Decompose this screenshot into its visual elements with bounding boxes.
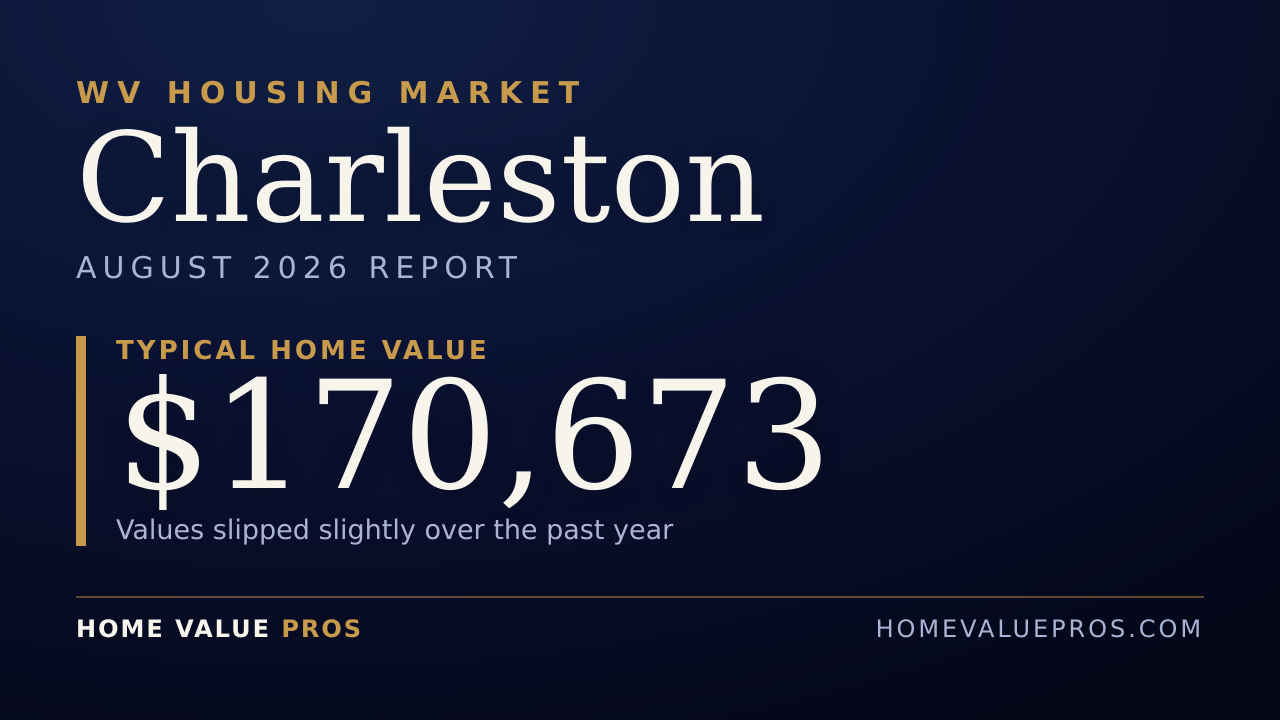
report date: AUGUST 2026 REPORT xyxy=(76,251,523,286)
website: HOMEVALUEPROS.COM xyxy=(876,615,1204,643)
stat note: Values slipped slightly over the past year xyxy=(116,515,673,546)
header eyebrow: WV HOUSING MARKET xyxy=(76,76,587,111)
footer divider xyxy=(76,596,1204,598)
stat value: $170,673 xyxy=(116,350,832,524)
brand name: HOME VALUE PROS xyxy=(76,615,363,643)
accent bar xyxy=(76,336,86,546)
title: Charleston xyxy=(76,106,765,250)
stat label: TYPICAL HOME VALUE xyxy=(116,336,490,366)
